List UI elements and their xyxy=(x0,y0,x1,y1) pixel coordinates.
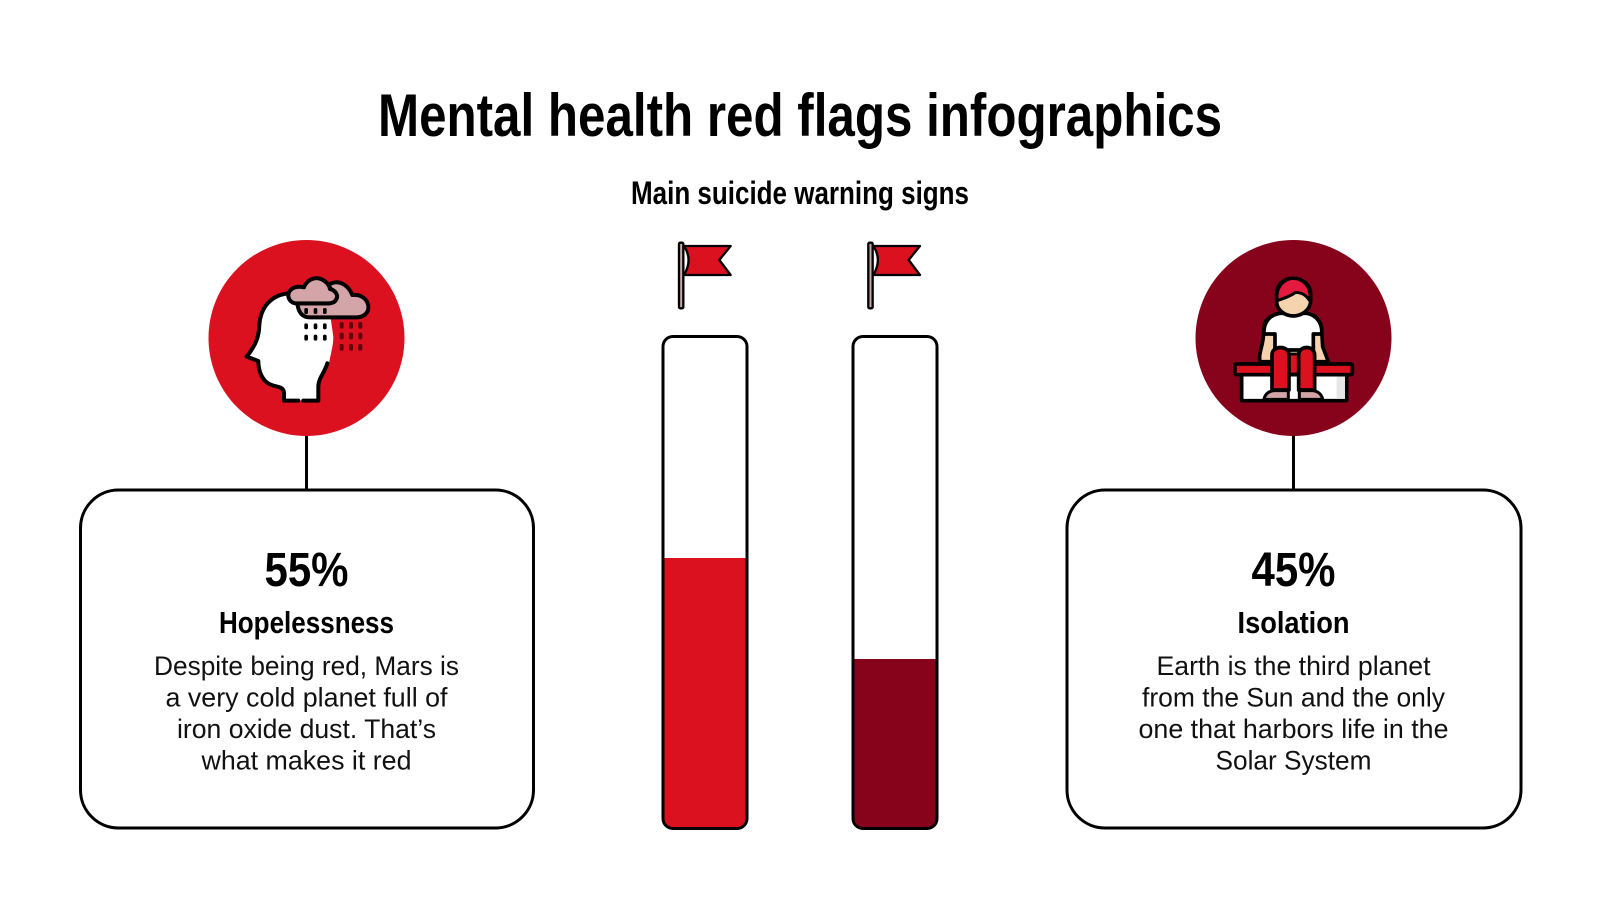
description: iron oxide dust. That’s xyxy=(177,714,436,744)
connector line xyxy=(1292,430,1295,490)
panel: hopelessness xyxy=(80,240,534,828)
title: Mental health red flags infographics xyxy=(378,82,1222,149)
text box xyxy=(1067,490,1521,828)
label: Hopelessness xyxy=(219,605,394,640)
label: Isolation xyxy=(1238,605,1350,640)
percentage: 45% xyxy=(1252,544,1336,597)
bar: 45% xyxy=(853,336,937,828)
bar chart: two thermometers xyxy=(663,243,937,828)
description: from the Sun and the only xyxy=(1142,682,1446,712)
description: a very cold planet full of xyxy=(166,682,448,712)
icon: head with rain clouds xyxy=(208,240,404,436)
description: Solar System xyxy=(1216,746,1372,776)
subtitle: Main suicide warning signs xyxy=(631,175,969,211)
icon: person sitting on bench xyxy=(1196,240,1392,436)
description: Earth is the third planet xyxy=(1156,651,1431,681)
flag left xyxy=(679,243,731,308)
description xyxy=(1138,651,1448,776)
description: what makes it red xyxy=(200,746,412,776)
description: Despite being red, Mars is xyxy=(154,651,459,681)
connector line xyxy=(305,430,308,490)
percentage: 55% xyxy=(264,544,348,597)
flag right xyxy=(868,243,920,308)
bar: 55% xyxy=(663,336,747,828)
description: one that harbors life in the xyxy=(1138,714,1448,744)
text box xyxy=(80,490,534,828)
description xyxy=(154,651,459,776)
panel: isolation xyxy=(1067,240,1521,828)
